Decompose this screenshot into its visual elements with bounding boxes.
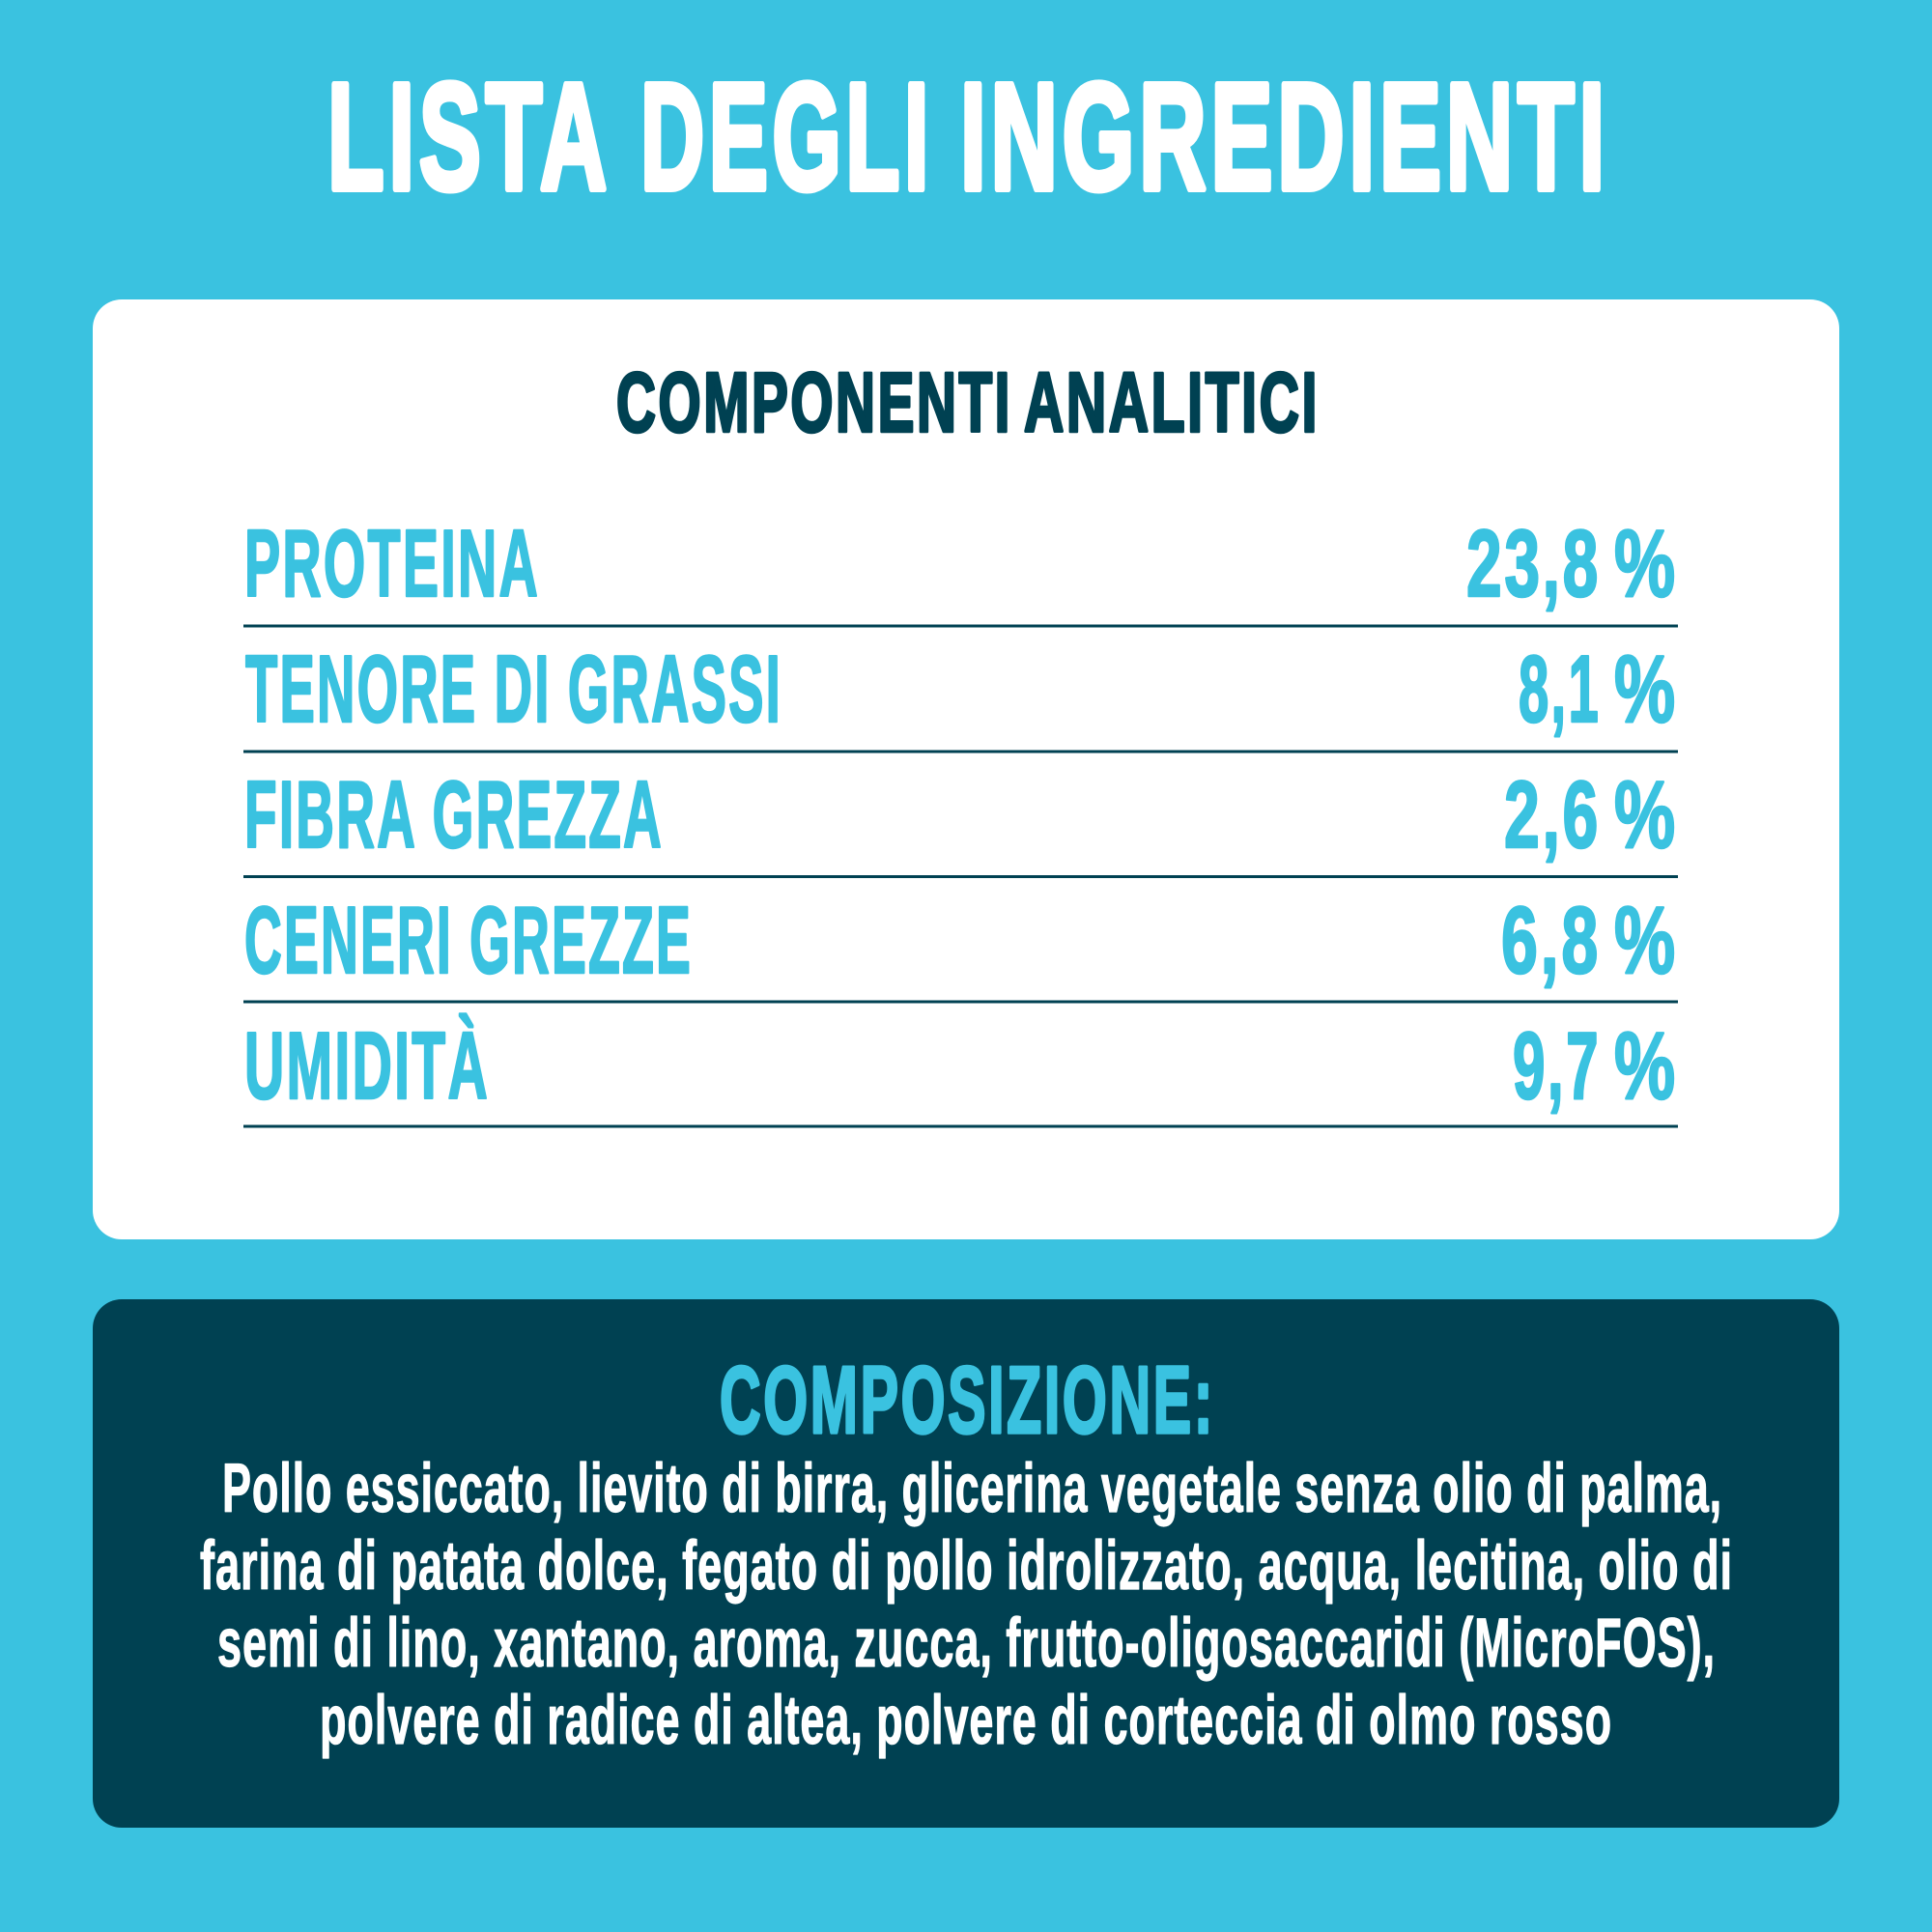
heading: composizione: COMPOSIZIONE:	[720, 1347, 1215, 1453]
row: tenore di grassi: %	[1614, 636, 1678, 742]
row: ceneri grezze: CENERI GREZZE	[244, 887, 693, 993]
row: umidità: %	[1614, 1012, 1678, 1119]
row: tenore di grassi: TENORE DI GRASSI	[245, 636, 782, 742]
panel: analytical components	[93, 299, 1839, 1239]
row: proteina: 23,8	[1466, 510, 1601, 616]
heading: componenti analitici: ANALITICI	[1024, 355, 1320, 450]
heading: componenti analitici: COMPONENTI	[616, 355, 1012, 450]
title	[327, 52, 1609, 222]
row: fibra grezza: 2,6	[1504, 761, 1601, 867]
row: umidità: UMIDITÀ	[244, 1012, 490, 1119]
row: proteina	[243, 510, 1678, 628]
row: proteina: PROTEINA	[244, 510, 540, 616]
row: tenore di grassi: 8,1	[1519, 636, 1601, 742]
row: umidità: 9,7	[1513, 1012, 1601, 1119]
title: DEGLI	[640, 52, 933, 222]
row: umidità	[243, 1012, 1678, 1128]
row: fibra grezza	[243, 761, 1678, 878]
row: ceneri grezze: %	[1614, 887, 1678, 993]
row: proteina: %	[1614, 510, 1678, 616]
panel: composition	[93, 1299, 1839, 1828]
ingredient list text	[200, 1451, 1733, 1759]
row: fibra grezza: %	[1614, 761, 1678, 867]
row: fibra grezza: FIBRA GREZZA	[244, 761, 664, 867]
row: ceneri grezze	[243, 887, 1678, 1003]
row: ceneri grezze: 6,8	[1501, 887, 1601, 993]
row: tenore di grassi	[243, 636, 1678, 753]
title: LISTA	[327, 52, 611, 222]
